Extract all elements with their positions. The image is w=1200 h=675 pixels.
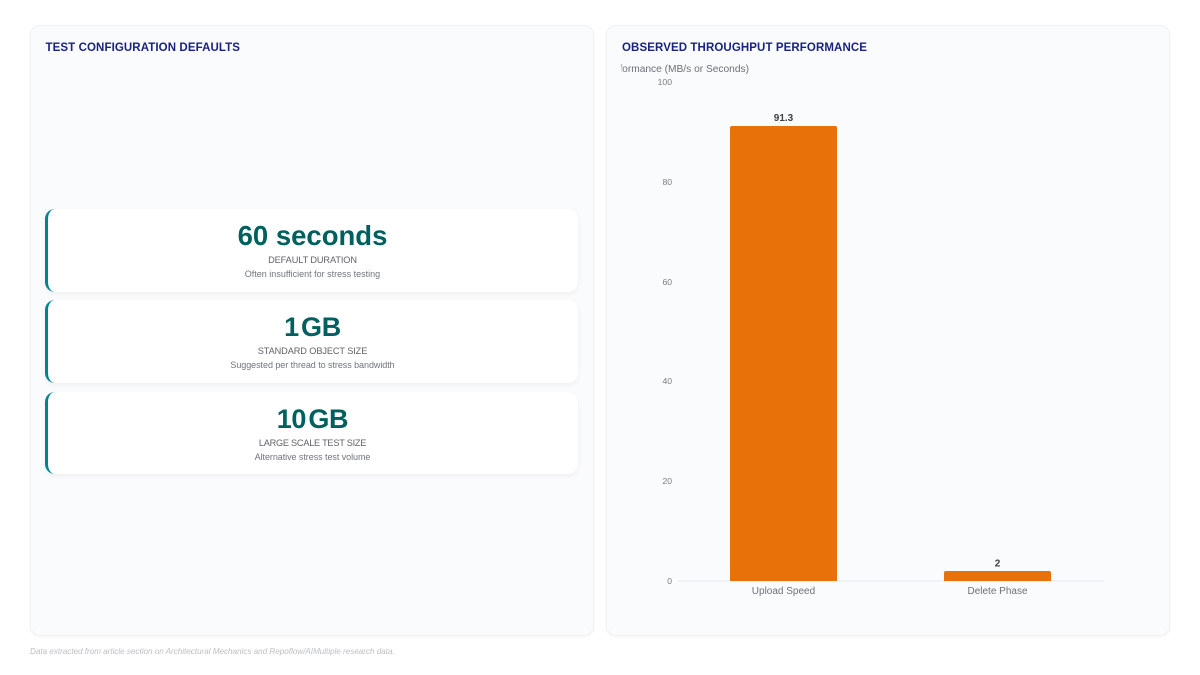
axis title, clipped: Performance (MB/s or Seconds)	[603, 64, 749, 75]
y axis labels: 100	[658, 77, 672, 87]
stat note: Often insufficient for stress testing	[245, 269, 380, 279]
y axis labels: 20	[662, 476, 672, 486]
heading: observed throughput performance: OBSERVED THROUGHPUT PERFORMANCE	[622, 42, 867, 54]
stat note: Alternative stress test volume	[255, 452, 370, 462]
stat card: default duration	[45, 209, 578, 292]
stat value: 1 GB	[284, 312, 341, 342]
y axis labels: 40	[662, 376, 672, 386]
y axis labels: 60	[662, 277, 672, 287]
y axis labels: 80	[662, 177, 672, 187]
stat value: 60 seconds	[238, 220, 387, 251]
bar: upload speed	[730, 113, 837, 597]
bar: delete phase	[944, 558, 1051, 597]
stat label: LARGE SCALE TEST SIZE	[259, 438, 366, 448]
bar chart: throughput	[621, 64, 1104, 596]
bar: delete phase: Delete Phase	[967, 586, 1028, 597]
stat label: STANDARD OBJECT SIZE	[258, 346, 367, 356]
y axis labels: 0	[667, 576, 672, 586]
bar: delete phase: 2	[995, 558, 1001, 570]
stat note: Suggested per thread to stress bandwidth	[230, 360, 395, 370]
stat label: DEFAULT DURATION	[268, 255, 357, 265]
stat card: large scale test size	[45, 392, 578, 474]
panel: observed throughput performance	[606, 25, 1170, 636]
bar: upload speed: 91.3	[774, 113, 794, 124]
panel: test configuration defaults	[30, 25, 594, 636]
bar: upload speed: Upload Speed	[752, 586, 815, 597]
axis baseline	[678, 580, 1104, 582]
footnote: Data extracted from article section on Architectural Mechanics and Repoflow/AIMultiple research data.	[30, 647, 395, 656]
heading: test configuration defaults: TEST CONFIGURATION DEFAULTS	[46, 42, 240, 54]
y axis labels	[658, 77, 672, 586]
stat value: 10 GB	[277, 404, 348, 434]
stat card: standard object size	[45, 300, 578, 383]
